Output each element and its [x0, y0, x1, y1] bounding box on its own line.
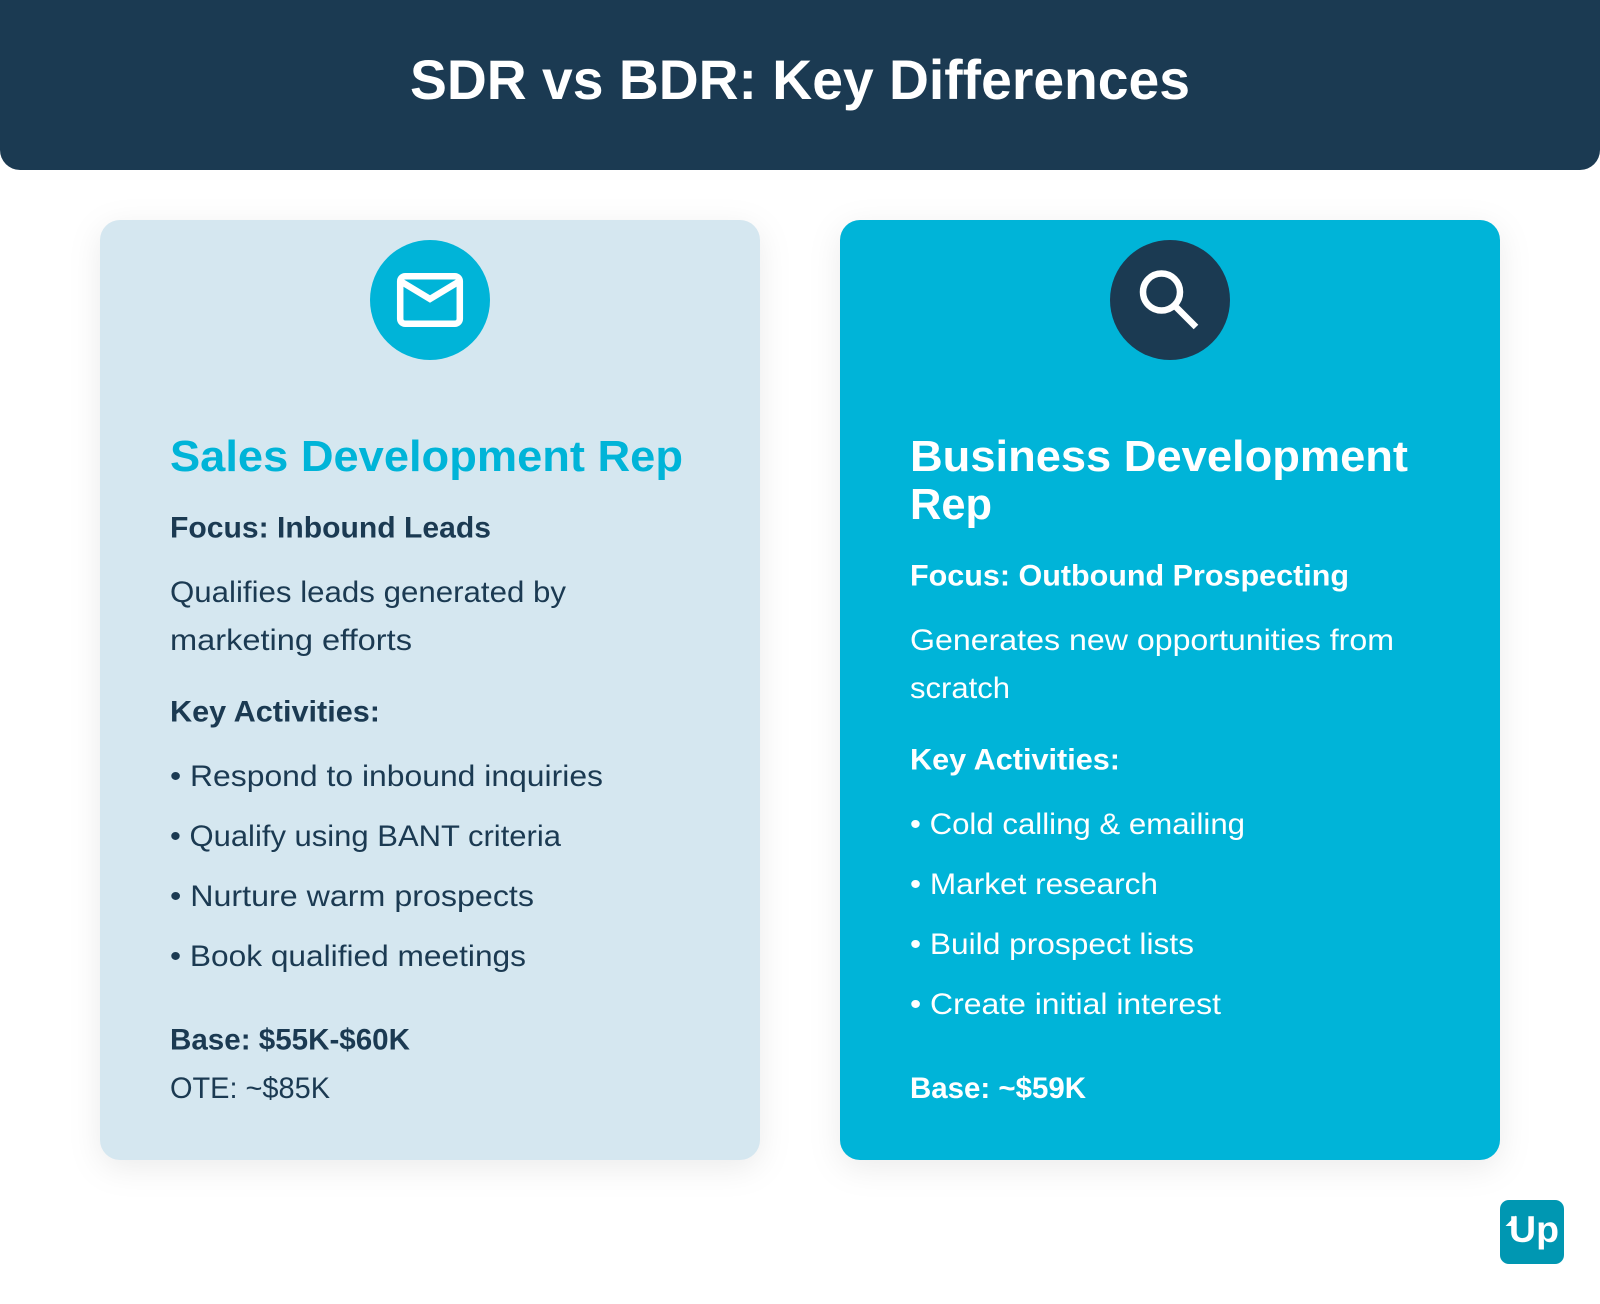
key activities heading: Key Activities:: [910, 744, 1120, 776]
description: [910, 624, 1394, 705]
key activities list: • Book qualified meetings: [170, 940, 526, 973]
heading: Sales Development Rep: Sales Development Rep: [170, 432, 683, 481]
description: marketing efforts: [170, 624, 412, 657]
key activities list: • Respond to inbound inquiries: [170, 760, 603, 793]
icon: magnifying glass: [1110, 240, 1230, 360]
key activities list: • Create initial interest: [910, 988, 1222, 1021]
description: Generates new opportunities from: [910, 624, 1394, 657]
key activities list: • Market research: [910, 868, 1158, 901]
key activities list: [910, 808, 1245, 1021]
icon: envelope: [370, 240, 490, 360]
title: SDR vs BDR: Key Differences: [410, 48, 1190, 111]
logo: Up: Up: [1509, 1209, 1559, 1250]
key activities list: • Nurture warm prospects: [170, 880, 534, 913]
salary: Base: $55K-$60K: [170, 1024, 410, 1056]
heading: Business Development Rep: [910, 432, 1408, 529]
key activities list: • Build prospect lists: [910, 928, 1194, 961]
panel: Business Development Rep: [840, 220, 1500, 1160]
heading: Business Development Rep: Business Development: [910, 432, 1408, 481]
key activities list: • Cold calling & emailing: [910, 808, 1245, 841]
key activities list: • Qualify using BANT criteria: [170, 820, 561, 853]
key activities list: [170, 760, 603, 973]
salary: OTE: ~$85K: [170, 1072, 330, 1105]
logo: Up: [1500, 1200, 1564, 1264]
key activities heading: Key Activities:: [170, 696, 380, 728]
salary: [170, 1024, 410, 1105]
salary: Base: ~$59K: [910, 1072, 1086, 1105]
description: scratch: [910, 672, 1010, 705]
focus: outbound prospecting: Focus: Outbound Prospecting: [910, 560, 1349, 592]
focus: inbound leads: Focus: Inbound Leads: [170, 512, 491, 544]
description: Qualifies leads generated by: [170, 576, 566, 609]
header banner: [0, 0, 1600, 170]
description: [170, 576, 566, 657]
panel: Sales Development Rep: [100, 220, 760, 1160]
heading: Business Development Rep: Rep: [910, 480, 992, 529]
